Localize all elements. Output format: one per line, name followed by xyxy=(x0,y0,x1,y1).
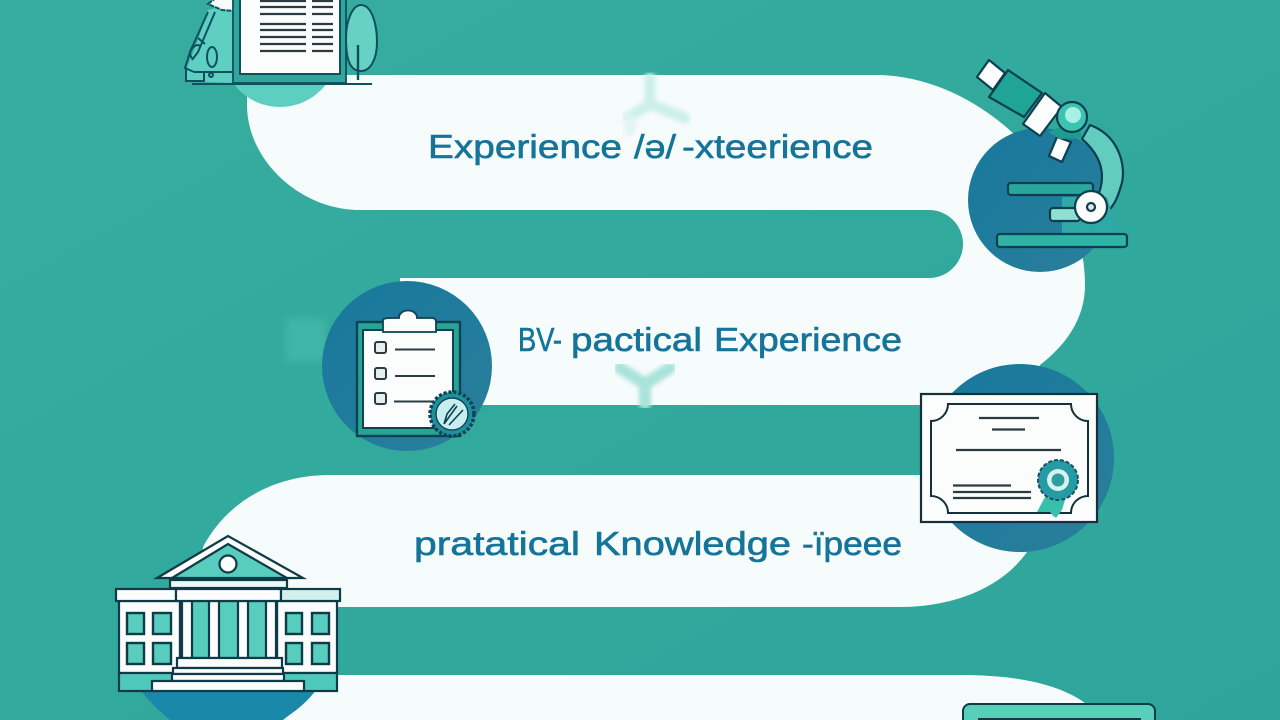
faint connector upper xyxy=(628,78,685,131)
icon circle xyxy=(926,364,1114,552)
clipboard board xyxy=(357,322,460,436)
step 5 label: pratatical xyxy=(414,525,580,562)
step 1 label: /ə/ xyxy=(634,128,677,165)
nosepiece xyxy=(1048,120,1082,139)
step 5: university building icon xyxy=(116,536,340,720)
base xyxy=(119,673,337,691)
tube xyxy=(989,70,1042,117)
upper cornice xyxy=(116,580,340,601)
building wings xyxy=(119,601,180,673)
ground line xyxy=(192,83,372,85)
step 3 label: Experience xyxy=(714,321,902,358)
base xyxy=(997,234,1127,247)
head knob xyxy=(1057,102,1087,132)
winding white ribbon xyxy=(203,75,1085,607)
certificate seal xyxy=(1037,460,1078,518)
icon circle xyxy=(968,128,1112,272)
step 3 label: pactical xyxy=(571,321,702,358)
side panel xyxy=(186,6,233,83)
step 1: document icon xyxy=(185,0,377,107)
upright and stand xyxy=(1062,197,1118,234)
stage xyxy=(1008,183,1093,195)
pediment xyxy=(157,536,303,578)
step 2: microscope icon xyxy=(968,60,1127,272)
step 4: certificate icon xyxy=(921,364,1114,552)
clipboard paper xyxy=(363,330,453,428)
tree xyxy=(346,5,377,80)
icon screen edge xyxy=(978,718,1141,720)
certificate inner frame xyxy=(931,404,1088,513)
icon circle xyxy=(222,0,338,107)
steps xyxy=(152,658,304,691)
specimen slide xyxy=(1050,208,1080,221)
step 5 label: -ïpeee xyxy=(802,525,902,562)
windows xyxy=(127,613,329,664)
icon circle xyxy=(322,281,492,451)
step 6: cropped bottom-right icon xyxy=(963,704,1155,720)
certificate sheet xyxy=(921,394,1097,522)
collar xyxy=(1023,93,1062,136)
document frame xyxy=(233,0,346,83)
faint background patch xyxy=(286,319,326,361)
certificate lines xyxy=(953,418,1061,498)
side panel details xyxy=(185,12,232,81)
step 1 label: -xteerience xyxy=(682,128,873,165)
document lines xyxy=(260,1,333,51)
colonnade xyxy=(180,601,277,658)
step 5 label: Knowledge xyxy=(594,525,791,562)
microscope arm xyxy=(1082,125,1123,210)
icon top edge xyxy=(963,704,1155,720)
badge xyxy=(430,392,474,436)
faint connector lower xyxy=(620,368,670,404)
checklist xyxy=(375,342,435,404)
step 3: clipboard icon xyxy=(322,281,492,451)
clipboard clip xyxy=(383,310,436,332)
objective lens xyxy=(1049,137,1071,162)
step 1 label: Experience xyxy=(428,128,622,165)
step 3 label: BV- xyxy=(518,321,562,358)
icon circle xyxy=(140,690,316,720)
eyepiece xyxy=(977,60,1005,90)
focus knob xyxy=(1075,191,1107,223)
lower ribbon segment xyxy=(250,675,1100,720)
document page xyxy=(240,0,340,74)
hand at top of document xyxy=(208,0,249,12)
